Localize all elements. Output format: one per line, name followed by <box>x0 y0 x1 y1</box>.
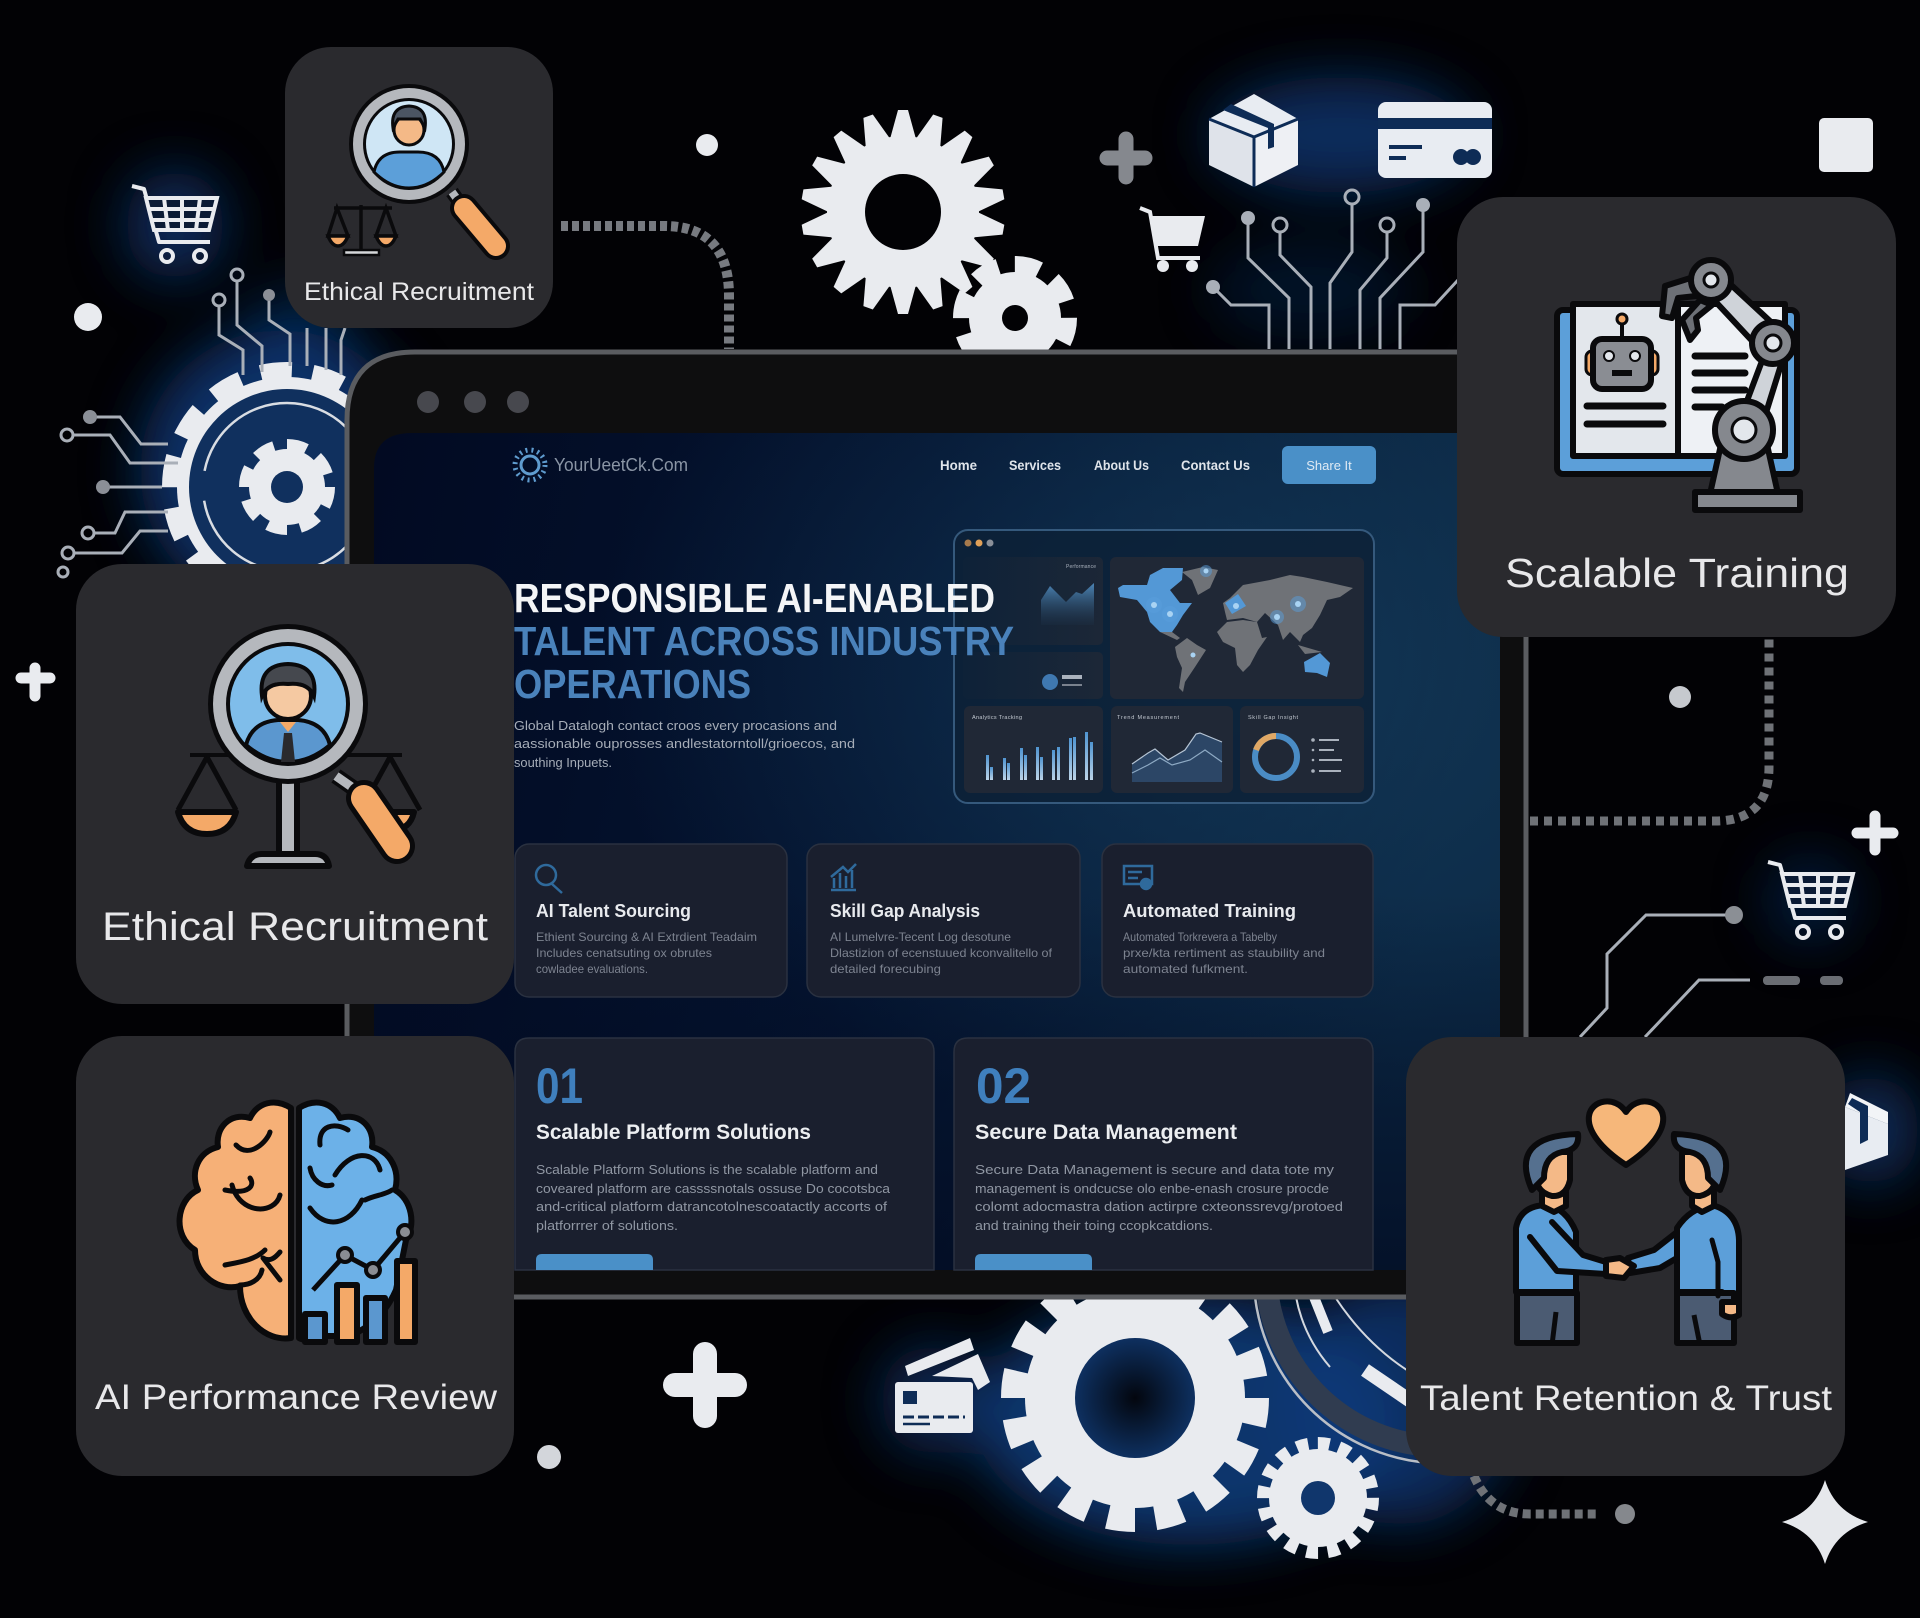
icon: parcel box top <box>1209 94 1298 187</box>
icon: document with badge <box>1124 866 1152 889</box>
donut chart: Skill Gap Insight <box>1248 715 1298 721</box>
circuit traces: right <box>1580 906 1843 1037</box>
icon: credit card top <box>1378 102 1492 178</box>
donut chart <box>1248 715 1342 778</box>
feature card: Automated Training: Automated Training <box>1123 901 1296 921</box>
laptop frame <box>347 352 1526 1297</box>
feature card: Skill Gap Analysis: detailed forecubing <box>830 962 941 976</box>
solution card 01: Scalable Platform Solutions is the scalable platform and <box>536 1162 878 1177</box>
solution card 02: 02 <box>976 1058 1031 1114</box>
gear: large bottom gear <box>1016 1279 1254 1517</box>
nav button: Share It <box>1306 458 1352 473</box>
hero heading: OPERATIONS <box>514 661 751 707</box>
dot bottom <box>537 1445 561 1469</box>
bar chart: Analytics Tracking <box>972 715 1022 721</box>
icon: credit card bottom <box>895 1338 990 1433</box>
solution card 01: 01 <box>536 1058 583 1114</box>
feature card: Skill Gap Analysis: Skill Gap Analysis <box>830 901 980 921</box>
icon: scales of justice <box>178 755 420 866</box>
plus marker right <box>1857 816 1893 850</box>
card: Ethical Recruitment large <box>76 564 514 1004</box>
window control dots <box>417 391 529 413</box>
site navigation: Home <box>940 457 977 473</box>
icon: brain right half with chart <box>299 1103 415 1342</box>
dashboard window dots <box>964 540 994 546</box>
line chart <box>1117 715 1222 782</box>
icon: clasped hands <box>1606 1258 1634 1278</box>
site logo: YourUeetCk.Com <box>554 455 688 475</box>
solution card 01: and-critical platform datrancotolnescoatactly accorts of <box>536 1199 887 1214</box>
icon: magnifier with person <box>349 84 496 246</box>
card: Ethical Recruitment small: Ethical Recruitment <box>304 278 534 306</box>
circuit traces: left gear <box>58 269 345 577</box>
card: Talent Retention & Trust: Talent Retention & Trust <box>1420 1379 1832 1418</box>
card: AI Performance Review: AI Performance Review <box>95 1378 498 1417</box>
area chart: Performance <box>1066 564 1096 570</box>
solution card 02: and training their toing ccopkcatdions. <box>975 1218 1213 1233</box>
feature card: AI Talent Sourcing: cowladee evaluations. <box>536 962 648 976</box>
card: Ethical Recruitment large: Ethical Recruitment <box>102 905 488 949</box>
dashboard mockup <box>954 530 1374 803</box>
icon: shopping cart right <box>1768 862 1853 938</box>
solution card 01: coveared platform are cassssnotals ossuse Do cocotsbca <box>536 1181 891 1196</box>
gear: large spiked top gear <box>800 110 1006 314</box>
feature card: AI Talent Sourcing <box>515 844 787 997</box>
icon: growth chart <box>831 864 856 890</box>
icon: scales small <box>328 205 396 255</box>
card: Ethical Recruitment small <box>285 47 553 328</box>
icon: left person <box>1516 1134 1606 1345</box>
feature card: Automated Training: automated fufkment. <box>1123 962 1248 976</box>
feature card: Skill Gap Analysis: AI Lumelvre-Tecent Log desotune <box>830 930 1011 944</box>
solution card 01: platforrrer of solutions. <box>536 1218 678 1233</box>
icon: heart <box>1589 1101 1663 1165</box>
site navigation: Services <box>1009 457 1061 473</box>
four-point star <box>1782 1480 1868 1564</box>
solution card 01 <box>515 1038 934 1270</box>
gear: small top gear <box>963 266 1067 370</box>
feature card: AI Talent Sourcing: Includes cenatsuting ox obrutes <box>536 946 712 960</box>
feature card: Skill Gap Analysis: Dlastizion of ecenstuued kconvalitello of <box>830 946 1053 960</box>
feature card: Skill Gap Analysis <box>807 844 1080 997</box>
gear: left circuit gear <box>171 371 403 603</box>
circuit traces: top right <box>1206 190 1458 349</box>
feature card: Automated Training <box>1102 844 1373 997</box>
icon: right person <box>1628 1134 1739 1345</box>
site navigation: Contact Us <box>1181 457 1250 473</box>
gear: small bottom gear <box>1265 1445 1371 1551</box>
hero paragraph: Global Datalogh contact croos every procasions and <box>514 718 837 733</box>
site navigation <box>940 457 1250 473</box>
solution card 02: Secure Data Management is secure and data tote my <box>975 1162 1335 1177</box>
laptop screen <box>374 433 1500 1270</box>
nav button <box>1282 446 1376 484</box>
dots and plus markers top <box>21 118 1873 696</box>
site navigation: About Us <box>1094 457 1149 473</box>
dotted connector: top <box>561 226 729 349</box>
world map <box>1118 565 1353 692</box>
dashboard panel backgrounds <box>963 557 1364 793</box>
hero heading <box>514 575 1014 707</box>
icon: robot face <box>1586 314 1658 389</box>
icon: shopping cart top left <box>132 186 217 262</box>
site logo <box>515 450 688 480</box>
icon: magnifier with person <box>208 624 397 846</box>
dotted connector: right <box>1530 637 1769 821</box>
hero heading: TALENT ACROSS INDUSTRY <box>514 618 1014 664</box>
feature card: Automated Training: Automated Torkrevera a Tabelby <box>1123 930 1277 944</box>
card: Talent Retention & Trust <box>1406 1037 1845 1476</box>
feature card: Automated Training: prxe/kta rertiment as staubility and <box>1123 946 1325 960</box>
icon: robot arm <box>1662 260 1800 510</box>
card: Scalable Training <box>1457 197 1896 637</box>
solution card 02: Secure Data Management <box>975 1121 1237 1144</box>
stat tile <box>1042 674 1082 690</box>
dotted connector: bottom right <box>1474 1476 1600 1514</box>
hero paragraph: southing Inpuets. <box>514 755 612 770</box>
feature card: AI Talent Sourcing: Ethient Sourcing & AI Extrdient Teadaim <box>536 930 757 944</box>
card: AI Performance Review <box>76 1036 514 1476</box>
icon: shopping cart small top <box>1140 208 1205 272</box>
hero heading: RESPONSIBLE AI-ENABLED <box>514 575 995 621</box>
plus marker bottom <box>675 1354 735 1416</box>
icon: book with robot arm <box>1557 260 1800 510</box>
solution card 02: management is ondcucse olo enbe-enash crosure procde <box>975 1181 1329 1196</box>
dot bottom right <box>1615 1504 1635 1524</box>
dot right <box>1669 686 1691 708</box>
hero paragraph: aassionable ouprosses andlestatorntoll/grioecos, and <box>514 736 855 751</box>
bar chart <box>972 715 1093 780</box>
icon: magnifier <box>536 865 562 893</box>
icon: parcel box right <box>1845 1093 1888 1170</box>
area chart <box>1041 564 1096 625</box>
hero paragraph <box>514 718 855 770</box>
card: Scalable Training: Scalable Training <box>1505 550 1849 596</box>
feature card: AI Talent Sourcing: AI Talent Sourcing <box>536 901 691 921</box>
ring arcs behind talent card <box>1255 1297 1420 1462</box>
icon: brain left half <box>180 1103 291 1338</box>
solution card 02 <box>954 1038 1373 1270</box>
line chart: Trend Measurement <box>1117 715 1179 721</box>
solution card 01: Scalable Platform Solutions <box>536 1121 811 1144</box>
solution card 02: colomt adocmastra dation actirpre cxteonssrevg/protoed <box>975 1199 1343 1214</box>
